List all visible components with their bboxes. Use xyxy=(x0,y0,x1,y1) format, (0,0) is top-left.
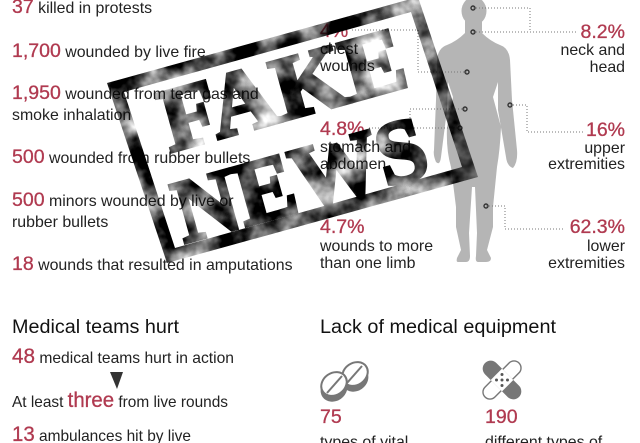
label: chest wounds: wounds xyxy=(319,58,375,75)
label: chest wounds: chest xyxy=(320,41,359,58)
label: upper extremities xyxy=(548,119,626,173)
label: lower extremities: extremities xyxy=(548,255,625,272)
arrow down xyxy=(110,372,123,389)
stat: 190 xyxy=(485,406,603,443)
stamp word: news: NEWS xyxy=(163,98,438,262)
stat: 75: 75 xyxy=(320,406,342,428)
label: more than one limb: 4.7% xyxy=(320,216,364,238)
human body silhouette xyxy=(434,0,517,262)
icon: pills xyxy=(316,357,373,407)
stat: tear gas: smoke inhalation xyxy=(12,107,131,124)
label: lower extremities xyxy=(548,216,626,272)
label: stomach and abdomen: stomach and xyxy=(320,139,411,156)
panel: casualty list xyxy=(12,0,293,275)
label: neck and head: 8.2% xyxy=(581,21,625,43)
stamp word: fake: FAKE xyxy=(149,9,416,171)
stat: 75 xyxy=(320,406,408,443)
heading: Medical teams hurt xyxy=(12,317,180,338)
label: neck and head xyxy=(560,21,625,76)
label: upper extremities: extremities xyxy=(548,156,625,173)
leader lines xyxy=(350,8,583,229)
stamp frame xyxy=(107,0,478,263)
label: lower extremities: 62.3% xyxy=(570,216,625,238)
stat: medical teams: 48 medical teams hurt in action xyxy=(12,345,234,368)
label: upper extremities: upper xyxy=(584,140,626,157)
label: stomach and abdomen xyxy=(320,118,411,173)
stat: live rounds: At least three from live rounds xyxy=(12,389,228,412)
heading: Lack of medical equipment xyxy=(320,317,557,338)
label: more than one limb: wounds to more xyxy=(319,238,433,255)
body marker dots xyxy=(458,6,512,208)
stamp: fake news xyxy=(107,0,478,263)
label: neck and head: head xyxy=(590,59,625,76)
label: chest wounds: 4% xyxy=(320,20,348,42)
label: upper extremities: 16% xyxy=(586,119,625,141)
label: more than one limb: than one limb xyxy=(320,255,416,272)
stat: minors: rubber bullets xyxy=(12,214,108,231)
label: chest wounds xyxy=(319,20,375,75)
label: lower extremities: lower xyxy=(587,238,626,255)
stat: rubber bullets: 500 wounded from rubber bullets xyxy=(12,146,250,168)
stat: minors: 500 minors wounded by live or xyxy=(12,189,234,211)
stat: tear gas xyxy=(12,82,259,124)
stat: 190: 190 xyxy=(485,406,518,428)
label: stomach and abdomen: abdomen xyxy=(320,156,386,173)
stat: amputations: 18 wounds that resulted in amputations xyxy=(12,253,293,275)
stat: tear gas: 1,950 wounded from tear gas and xyxy=(12,82,259,104)
stat: minors xyxy=(12,189,234,231)
label: stomach and abdomen: 4.8% xyxy=(320,118,364,140)
panel: medical teams hurt xyxy=(12,317,234,443)
icon: bandage xyxy=(479,357,525,403)
panel: lack of medical equipment xyxy=(316,317,603,443)
label: neck and head: neck and xyxy=(560,42,625,59)
stat: live fire: 1,700 wounded by live fire xyxy=(12,40,206,62)
label: more than one limb xyxy=(319,216,433,272)
